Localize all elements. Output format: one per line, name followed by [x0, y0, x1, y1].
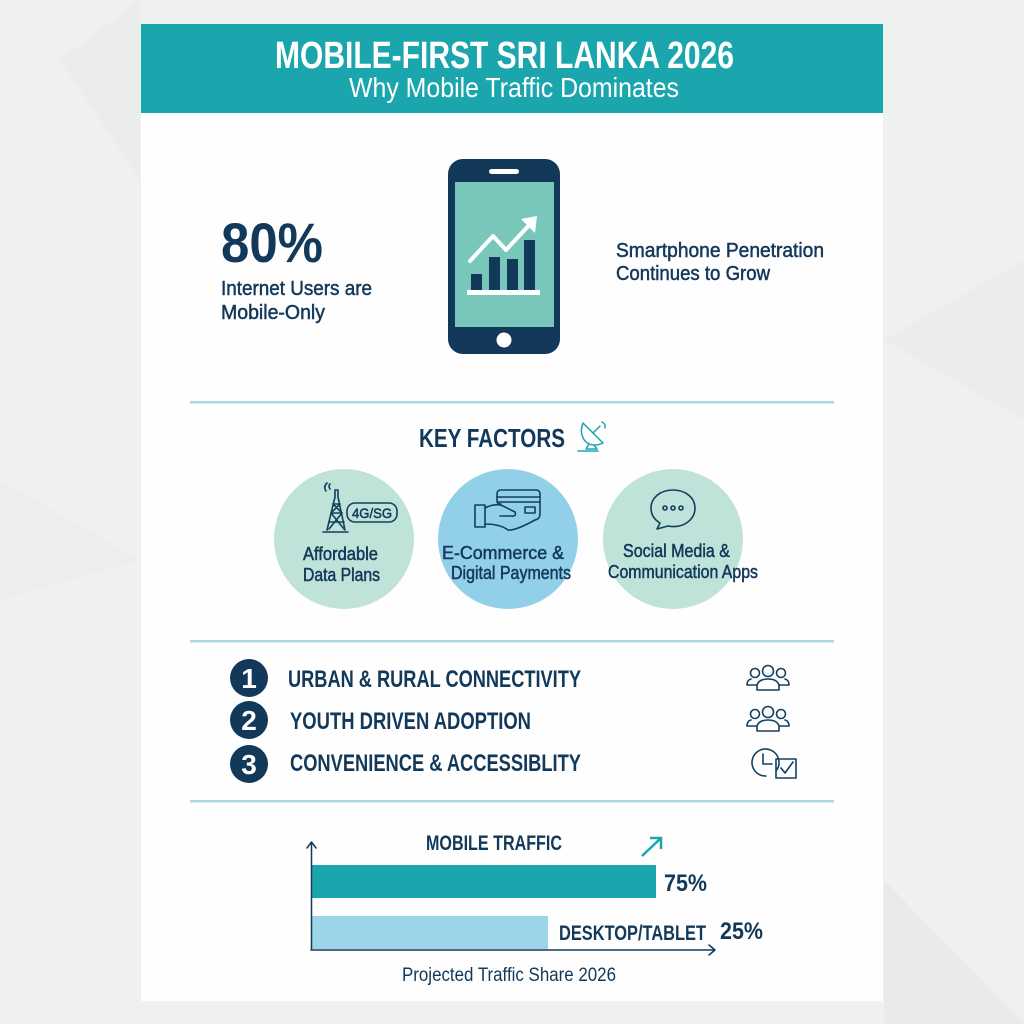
- factor: affordable data plans: [274, 469, 414, 609]
- bar chart: projected traffic share: Projected Traffic Share 2026: [402, 965, 616, 986]
- title: MOBILE-FIRST SRI LANKA 2026: [275, 35, 734, 77]
- list item 1: 1: [241, 663, 257, 694]
- panel: infographic card: [141, 24, 883, 1001]
- bar: desktop/tablet: [312, 916, 548, 949]
- icon: speech bubble: [651, 490, 695, 529]
- factor: social media and communication apps: [603, 469, 758, 609]
- icon: satellite dish: [578, 422, 605, 451]
- icon: hand holding card: [475, 490, 540, 530]
- list item 3: [230, 745, 796, 783]
- factor: e-commerce and digital payments: [438, 469, 578, 609]
- factor: social media and communication apps: Social Media &: [623, 541, 730, 561]
- list item 2: 2: [241, 705, 257, 736]
- icon: cell tower with 4G/5G badge: [323, 483, 397, 532]
- bar chart: projected traffic share: MOBILE TRAFFIC: [426, 832, 562, 855]
- bar: mobile: [312, 865, 656, 898]
- stat: 80 percent mobile-only: [221, 211, 372, 324]
- list item 2: YOUTH DRIVEN ADOPTION: [290, 708, 531, 735]
- stat: 80 percent mobile-only: Internet Users are: [221, 278, 372, 300]
- subtitle: Why Mobile Traffic Dominates: [349, 72, 679, 103]
- list item 2: [230, 701, 789, 739]
- factor: social media and communication apps: Communication Apps: [608, 562, 758, 582]
- text: smartphone penetration: [616, 240, 824, 285]
- icon: up arrow: [642, 838, 661, 856]
- factor: e-commerce and digital payments: E-Commerce &: [442, 543, 564, 563]
- factor: affordable data plans: 4G/SG: [352, 505, 392, 521]
- list item 3: CONVENIENCE & ACCESSIBLITY: [290, 750, 581, 777]
- factor: affordable data plans: Affordable: [303, 544, 378, 564]
- bar chart: projected traffic share: 25%: [720, 918, 763, 945]
- stat: 80 percent mobile-only: 80%: [221, 211, 323, 274]
- factor: e-commerce and digital payments: Digital Payments: [451, 563, 571, 583]
- icon: people: [747, 666, 789, 690]
- icon: smartphone with growth chart: [448, 159, 560, 354]
- list item 1: [230, 659, 789, 697]
- heading: key factors: KEY FACTORS: [419, 423, 565, 453]
- bar chart: projected traffic share: [307, 832, 763, 986]
- icon: clock and checkbox: [752, 749, 796, 778]
- stat: 80 percent mobile-only: Mobile-Only: [221, 302, 325, 324]
- text: smartphone penetration: Continues to Grow: [616, 263, 771, 285]
- factor: affordable data plans: Data Plans: [303, 565, 380, 585]
- bar chart: projected traffic share: 75%: [664, 870, 707, 897]
- header banner: [141, 24, 883, 113]
- bar chart: projected traffic share: DESKTOP/TABLET: [559, 922, 706, 945]
- icon: people: [747, 706, 789, 731]
- text: smartphone penetration: Smartphone Penetration: [616, 240, 824, 262]
- list item 3: 3: [241, 749, 257, 780]
- list item 1: URBAN & RURAL CONNECTIVITY: [288, 666, 581, 693]
